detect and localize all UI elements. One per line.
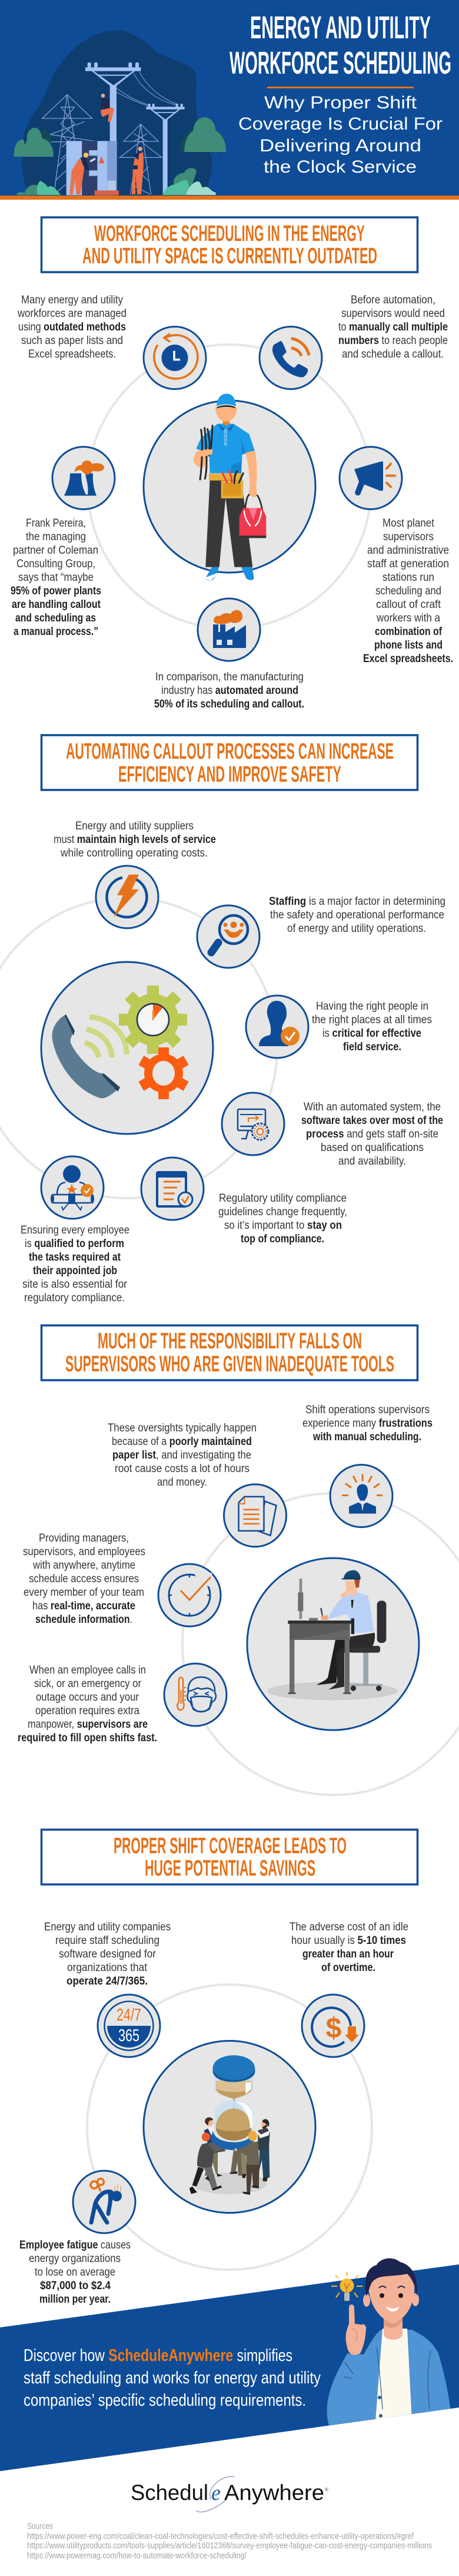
- text: compliance: Regulatory utility compliance: [219, 1192, 347, 1205]
- text: outdated methods: such as paper lists and: [21, 335, 123, 347]
- text: plant supervisors: scheduling and: [375, 585, 441, 597]
- icon: megaphone: [340, 447, 402, 509]
- text: 24/7/365 software: require staff scheduling: [55, 1935, 159, 1947]
- text: open shifts: required to fill open shifts fast.: [18, 1732, 157, 1744]
- text: idle hour cost: hour usually is 5-10 times: [291, 1935, 406, 1947]
- text: plant supervisors: workers with a: [376, 612, 440, 624]
- text: compliance: so it’s important to stay on: [224, 1219, 342, 1232]
- text: before automation: Before automation,: [351, 294, 435, 306]
- text: frustrations: [302, 1404, 433, 1443]
- icon: clock with check: [158, 1564, 221, 1626]
- text: manufacturing comparison: [154, 671, 304, 710]
- text: plant supervisors: [363, 517, 453, 665]
- text: oversights: root cause costs a lot of hours: [115, 1463, 250, 1475]
- text: schedule access: supervisors, and employees: [23, 1546, 145, 1558]
- text: compliance: guidelines change frequently,: [218, 1206, 347, 1218]
- icon: factory: [198, 598, 260, 661]
- text: schedule access: schedule access ensures: [29, 1573, 139, 1585]
- text: Frank Pereira quote: the managing: [26, 531, 86, 543]
- trees: [24, 156, 37, 184]
- text: plant supervisors: and administrative: [367, 544, 449, 557]
- text: employee fatigue: to lose on average: [35, 2266, 115, 2279]
- text: oversights: These oversights typically happen: [108, 1422, 257, 1434]
- icon: phone with signal: [260, 326, 322, 389]
- text: open shifts: [18, 1664, 157, 1744]
- text: Frank Pereira quote: and scheduling as: [15, 612, 96, 624]
- text: staffing: Staffing is a major factor in determining: [269, 895, 445, 908]
- text: open shifts: manpower, supervisors are: [28, 1718, 148, 1731]
- text: automated system: [301, 1101, 443, 1168]
- text: plant supervisors: combination of: [375, 626, 443, 638]
- icon: software with gear: [222, 1093, 284, 1155]
- text: automated system: based on qualifications: [321, 1142, 424, 1154]
- text: outdated methods: Excel spreadsheets.: [28, 348, 116, 361]
- section 2 heading: [41, 735, 418, 790]
- text: schedule access: schedule information.: [35, 1613, 132, 1626]
- icon: 24/7/365: [98, 1995, 160, 2057]
- text: qualified employees: the tasks required at: [29, 1251, 121, 1264]
- text: idle hour cost: [290, 1921, 408, 1974]
- icon: qualified employee: [41, 1156, 104, 1219]
- text: Frank Pereira quote: Frank Pereira,: [26, 517, 86, 530]
- icon: clock with arrow: [144, 326, 206, 389]
- logo: ScheduleAnywhere: Anywhere: [224, 2481, 324, 2505]
- text: Frank Pereira quote: says that “maybe: [18, 571, 94, 584]
- text: outdated methods: using outdated methods: [18, 321, 126, 333]
- text: right people: [312, 1000, 432, 1053]
- text: qualified employees: is qualified to perform: [25, 1238, 124, 1250]
- icon: 24/7/365: 365: [118, 2026, 139, 2045]
- title: [230, 10, 451, 81]
- text: Frank Pereira quote: [11, 517, 101, 638]
- bushes: [16, 185, 44, 195]
- text: schedule access: has real-time, accurate: [32, 1600, 135, 1612]
- text: schedule access: every member of your team: [24, 1586, 144, 1599]
- text: qualified employees: site is also essential for: [22, 1278, 128, 1291]
- text: schedule access: with anywhere, anytime: [32, 1559, 135, 1572]
- text: open shifts: When an employee calls in: [29, 1664, 146, 1676]
- subtitle: Why Proper Shift: [264, 93, 417, 113]
- logo: ScheduleAnywhere: e: [211, 2481, 221, 2505]
- text: plant supervisors: stations run: [382, 571, 434, 584]
- call to action text: companies’ specific scheduling requirements.: [24, 2391, 306, 2410]
- text: plant supervisors: supervisors: [383, 531, 434, 543]
- text: before automation: [338, 294, 448, 361]
- subtitle: Coverage Is Crucial For: [238, 114, 443, 134]
- text: before automation: supervisors would need: [341, 307, 445, 320]
- text: outdated methods: workforces are managed: [17, 307, 127, 320]
- sources: Sources: [27, 2521, 53, 2531]
- call to action text: [24, 2346, 321, 2410]
- subtitle: the Clock Service: [264, 157, 417, 177]
- text: employee fatigue: million per year.: [39, 2293, 111, 2306]
- text: before automation: and schedule a callout.: [342, 348, 444, 361]
- text: right people: field service.: [343, 1041, 401, 1053]
- illustration: electrician: [193, 393, 266, 580]
- text: schedule access: [23, 1532, 145, 1626]
- icon: 24/7/365: 24/7: [117, 2006, 141, 2025]
- text: staffing: [269, 895, 445, 935]
- icon: sick employee with mask: [164, 1664, 227, 1726]
- section 3 diagram: [182, 1493, 459, 1795]
- text: 24/7/365 software: organizations that: [67, 1962, 148, 1974]
- section 4 heading: HUGE POTENTIAL SAVINGS: [145, 1856, 315, 1881]
- icon: dollar with down arrow: $: [326, 2013, 342, 2044]
- call to action text: staff scheduling and works for energy and utility: [24, 2369, 321, 2387]
- text: staffing: of energy and utility operations.: [287, 922, 426, 935]
- section 3 heading: [41, 1325, 418, 1380]
- icon: compliance document: [141, 1158, 204, 1220]
- icon: person with check: [246, 996, 308, 1058]
- text: compliance: top of compliance.: [241, 1233, 324, 1245]
- icon: dollar with down arrow: [302, 1995, 364, 2057]
- text: oversights: because of a poorly maintained: [112, 1436, 252, 1448]
- icon: paper lists: [224, 1484, 286, 1547]
- subtitle: Delivering Around: [260, 136, 421, 156]
- logo: ScheduleAnywhere: Schedul: [131, 2481, 208, 2505]
- illustration: man with idea: [327, 2258, 451, 2433]
- text: plant supervisors: Most planet: [382, 517, 435, 530]
- icon: cooling towers: [52, 447, 115, 509]
- text: employee fatigue: Employee fatigue causes: [19, 2239, 131, 2251]
- subtitle: [238, 93, 443, 177]
- section 1 heading: [41, 217, 418, 272]
- text: automated system: process and gets staff on-site: [306, 1128, 438, 1140]
- logo: ScheduleAnywhere: ®: [325, 2487, 328, 2492]
- illustration: supervisor at desk: [267, 1570, 398, 1700]
- text: employee fatigue: energy organizations: [29, 2253, 121, 2265]
- text: Frank Pereira quote: a manual process.”: [14, 626, 98, 638]
- header banner: [0, 0, 459, 200]
- text: right people: the right places at all times: [312, 1014, 432, 1026]
- text: employee fatigue: [19, 2239, 131, 2306]
- text: oversights: and money.: [157, 1476, 207, 1489]
- text: qualified employees: their appointed job: [33, 1265, 117, 1277]
- text: outdated methods: Many energy and utility: [21, 294, 123, 306]
- section 4 diagram: [87, 1985, 372, 2270]
- text: frustrations: Shift operations supervisors: [305, 1404, 430, 1416]
- text: service levels: while controlling operating costs.: [60, 847, 208, 859]
- workers: [69, 107, 144, 194]
- text: outdated methods: [17, 294, 127, 361]
- text: schedule access: Providing managers,: [39, 1532, 129, 1545]
- icon: lightning bolt: [96, 866, 158, 928]
- call to action text: Discover how ScheduleAnywhere simplifies: [24, 2346, 292, 2365]
- call to action band: [0, 2258, 459, 2471]
- illustration: team holding hourglass: [189, 2055, 270, 2195]
- text: frustrations: with manual scheduling.: [312, 1431, 421, 1443]
- text: automated system: and availability.: [338, 1155, 406, 1168]
- section 1 diagram: [88, 345, 371, 629]
- text: open shifts: operation requires extra: [35, 1705, 139, 1717]
- text: 24/7/365 software: [44, 1921, 171, 1988]
- text: frustrations: experience many frustrations: [302, 1417, 433, 1430]
- text: right people: Having the right people in: [316, 1000, 428, 1013]
- text: qualified employees: regulatory compliance.: [24, 1292, 125, 1304]
- text: service levels: must maintain high levels of service: [54, 834, 216, 846]
- text: manufacturing comparison: industry has automated around: [161, 684, 298, 697]
- logo: ScheduleAnywhere: [131, 2476, 328, 2512]
- text: oversights: paper list, and investigating the: [112, 1449, 251, 1461]
- text: service levels: Energy and utility suppliers: [75, 820, 194, 832]
- text: Frank Pereira quote: partner of Coleman: [13, 544, 98, 557]
- icon: fatigued worker: [73, 2171, 135, 2233]
- text: automated system: With an automated system, the: [304, 1101, 441, 1113]
- text: service levels: [54, 820, 216, 859]
- text: 24/7/365 software: Energy and utility companies: [44, 1921, 171, 1933]
- text: staffing: the safety and operational performance: [270, 909, 444, 921]
- icon: frustrated supervisor: [330, 1464, 393, 1527]
- text: plant supervisors: phone lists and: [374, 639, 443, 652]
- text: Frank Pereira quote: Consulting Group,: [16, 558, 95, 570]
- text: manufacturing comparison: In comparison, the manufacturing: [155, 671, 304, 683]
- text: compliance: [218, 1192, 347, 1245]
- illustration: phone and gears: [52, 986, 189, 1099]
- text: idle hour cost: greater than an hour: [302, 1948, 394, 1960]
- text: open shifts: sick, or an emergency or: [34, 1678, 142, 1690]
- text: right people: is critical for effective: [322, 1027, 421, 1040]
- text: idle hour cost: of overtime.: [321, 1962, 375, 1974]
- text: plant supervisors: staff at generation: [367, 558, 449, 570]
- text: plant supervisors: callout of craft: [376, 598, 441, 611]
- illustration: power line workers: [14, 31, 226, 196]
- icon: magnifier on people: [197, 905, 260, 968]
- text: before automation: numbers to reach people: [338, 335, 448, 347]
- text: oversights: [108, 1422, 257, 1489]
- sources: [27, 2521, 432, 2561]
- text: Frank Pereira quote: 95% of power plants: [11, 585, 101, 597]
- text: qualified employees: Ensuring every employee: [21, 1224, 129, 1236]
- text: 24/7/365 software: operate 24/7/365.: [66, 1975, 148, 1988]
- section 4 heading: [41, 1830, 418, 1884]
- text: Frank Pereira quote: are handling callout: [12, 598, 101, 611]
- text: idle hour cost: The adverse cost of an idle: [290, 1921, 408, 1933]
- section 2 diagram: [0, 898, 277, 1198]
- sources: https://www.powermag.com/how-to-automate-workforce-scheduling/: [27, 2551, 247, 2561]
- text: qualified employees: [21, 1224, 129, 1304]
- text: employee fatigue: $87,000 to $2.4: [40, 2280, 111, 2292]
- text: open shifts: outage occurs and your: [36, 1691, 139, 1704]
- text: 24/7/365 software: software designed for: [59, 1948, 157, 1960]
- text: manufacturing comparison: 50% of its scheduling and callout.: [154, 698, 304, 710]
